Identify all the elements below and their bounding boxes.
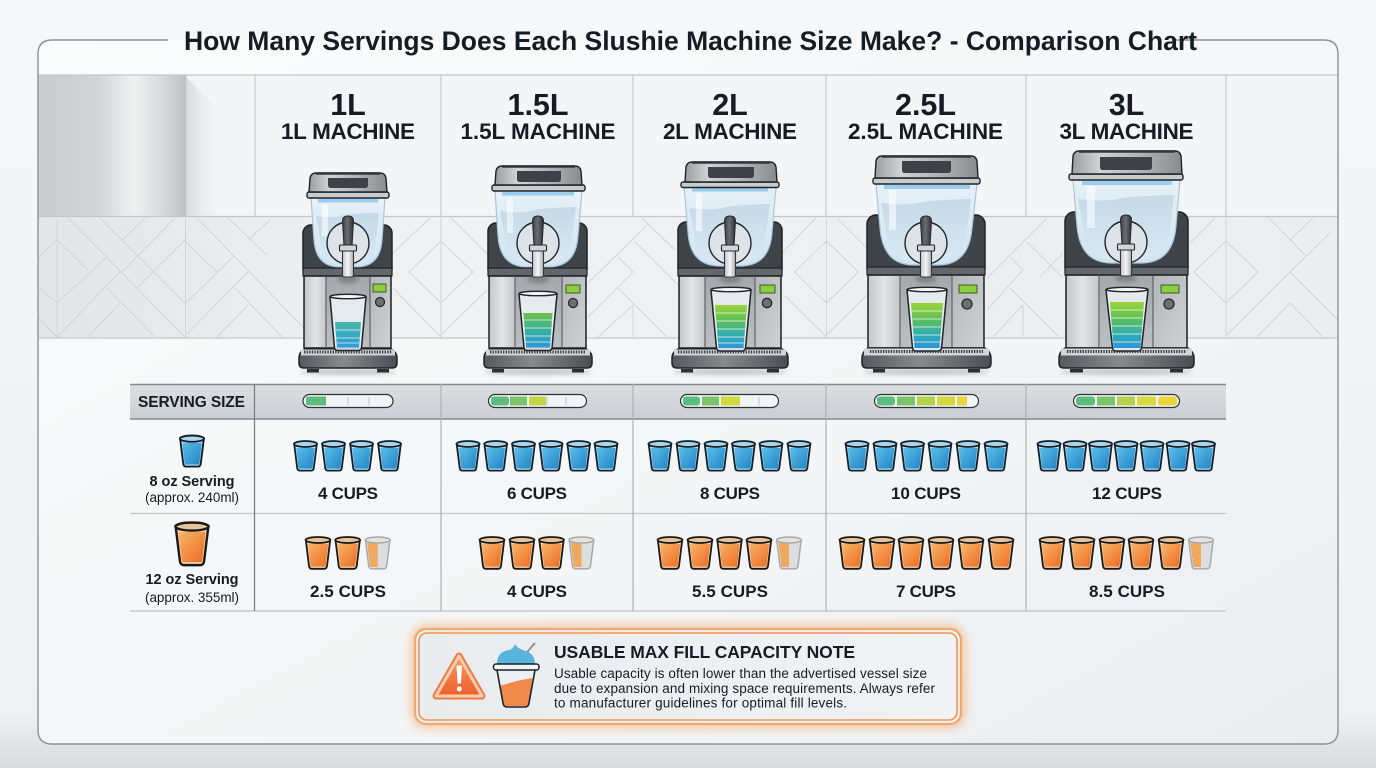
tile shadow — [186, 77, 225, 216]
machine: 1.5L — [484, 166, 592, 374]
row: 8 oz cups, 2.5L: 10 CUPS — [891, 484, 961, 503]
icon: slushie cup — [494, 643, 539, 707]
row: 12 oz cups, 3L: 8.5 CUPS — [1089, 582, 1165, 601]
icon: 8 oz cup — [180, 436, 204, 467]
row label: 12 oz — [145, 522, 239, 605]
brushed steel square — [38, 75, 186, 216]
row: 8 oz cups, 3L — [1038, 441, 1215, 503]
row: 8 oz cups, 1L: 4 CUPS — [318, 484, 378, 503]
row: 12 oz cups, 1.5L — [480, 537, 594, 601]
row label: 12 oz: 12 oz Serving — [146, 572, 238, 588]
machine: 2L — [672, 162, 788, 374]
header: 1L: 1L — [330, 88, 366, 122]
header: 1.5L: 1.5L MACHINE — [460, 119, 616, 144]
row: 12 oz cups, 1L: 2.5 CUPS — [310, 582, 386, 601]
header: 2.5L — [848, 88, 1003, 144]
row: 8 oz cups, 1.5L: 6 CUPS — [507, 484, 567, 503]
note body: due to expansion and mixing space requirements. Always refer — [554, 681, 936, 696]
level bar: 3L — [1074, 394, 1180, 408]
row: 8 oz cups, 2L — [648, 441, 810, 503]
header: 3L — [1060, 88, 1194, 144]
header: 2L: 2L — [712, 88, 748, 122]
row: 8 oz cups, 1L — [294, 441, 401, 503]
row label: 8 oz: 8 oz Serving — [150, 474, 234, 490]
header: 1L — [281, 88, 415, 144]
herringbone tile band — [38, 217, 1338, 338]
kitchen wall backdrop — [38, 75, 1338, 338]
table header row — [130, 384, 1226, 419]
row: 8 oz cups, 2L: 8 CUPS — [700, 484, 760, 503]
icon: warning triangle — [436, 656, 482, 696]
note body: to manufacturer guidelines for optimal fill levels. — [554, 696, 847, 710]
row: 12 oz cups, 1L — [306, 537, 390, 601]
note body — [554, 666, 936, 710]
level bar: 1.5L — [488, 394, 586, 408]
header: 2L — [663, 88, 797, 144]
level bar: 2L — [680, 394, 778, 408]
header: 2.5L: 2.5L MACHINE — [848, 119, 1003, 144]
header: 2L: 2L MACHINE — [663, 119, 797, 144]
note body: Usable capacity is often lower than the advertised vessel size — [554, 666, 927, 681]
header: 1.5L — [460, 88, 616, 144]
level bar: 2.5L — [874, 394, 978, 408]
row: 12 oz cups, 3L — [1040, 537, 1213, 601]
row label: 8 oz: (approx. 240ml) — [145, 490, 239, 505]
header: 3L: 3L — [1109, 88, 1144, 122]
row label: 8 oz — [145, 436, 239, 505]
title: How Many Servings Does Each Slushie Machine Size Make? - Comparison Chart — [184, 26, 1197, 56]
row: 8 oz cups, 2.5L — [846, 441, 1008, 503]
label: serving size: SERVING SIZE — [138, 394, 245, 411]
row: 8 oz cups, 1.5L — [456, 441, 618, 503]
machine: 3L — [1059, 151, 1194, 374]
row: 12 oz cups, 2L — [658, 537, 801, 601]
header: 3L: 3L MACHINE — [1060, 119, 1194, 144]
header: 2.5L: 2.5L — [895, 88, 956, 122]
row: 12 oz cups, 2.5L — [840, 537, 1013, 601]
row label: 12 oz: (approx. 355ml) — [145, 590, 239, 605]
level bar: 1L — [303, 394, 393, 408]
callout: usable max fill capacity note — [415, 629, 961, 724]
column headers — [281, 88, 1194, 144]
row: 8 oz cups, 3L: 12 CUPS — [1092, 484, 1162, 503]
row: 12 oz cups, 2.5L: 7 CUPS — [896, 582, 956, 601]
header: 1.5L: 1.5L — [508, 88, 568, 122]
header: 1L: 1L MACHINE — [281, 119, 415, 144]
machine: 1L — [299, 173, 397, 374]
icon: 12 oz cup — [175, 522, 209, 565]
note heading: USABLE MAX FILL CAPACITY NOTE — [554, 642, 855, 662]
row: 12 oz cups, 2L: 5.5 CUPS — [692, 582, 768, 601]
machine: 2.5L — [862, 156, 991, 374]
comparison table — [130, 384, 1226, 611]
row: 12 oz cups, 1.5L: 4 CUPS — [507, 582, 567, 601]
